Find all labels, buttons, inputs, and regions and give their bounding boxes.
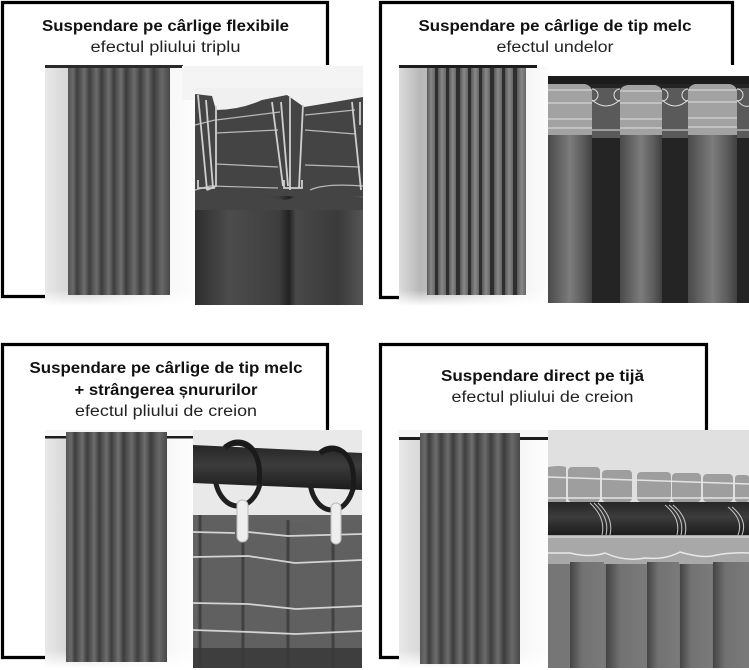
- heading: Suspendare pe cârlige de tip melc: [418, 18, 692, 35]
- panel: snail hooks, wave effect: [380, 2, 749, 306]
- frame: [380, 2, 732, 298]
- photo: hook detail: [182, 66, 363, 305]
- photo: rod pocket detail: [548, 430, 749, 668]
- photo: full curtain: [399, 65, 548, 306]
- photo: rod and rings detail: [193, 430, 362, 668]
- subheading: efectul pliului de creion: [452, 389, 634, 406]
- photo: full curtain: [45, 65, 195, 306]
- heading line two: + strângerea șnururilor: [74, 382, 258, 399]
- subheading: efectul pliului de creion: [75, 403, 257, 420]
- heading: Suspendare pe cârlige flexibile: [42, 18, 289, 35]
- heading: Suspendare pe cârlige de tip melc: [30, 360, 303, 377]
- photo: full curtain: [45, 430, 193, 668]
- panel: snail hooks with cord: [2, 344, 362, 668]
- photo: hook detail: [548, 76, 749, 303]
- frame: [380, 344, 706, 658]
- panel: flexible hooks: [2, 2, 363, 306]
- subheading: efectul undelor: [496, 39, 614, 56]
- heading: Suspendare direct pe tijă: [441, 368, 644, 385]
- panel: direct on rod: [380, 344, 749, 668]
- subheading: efectul pliului triplu: [90, 39, 240, 56]
- frame: [2, 2, 328, 296]
- frame: [2, 344, 328, 658]
- photo: full curtain: [399, 430, 548, 668]
